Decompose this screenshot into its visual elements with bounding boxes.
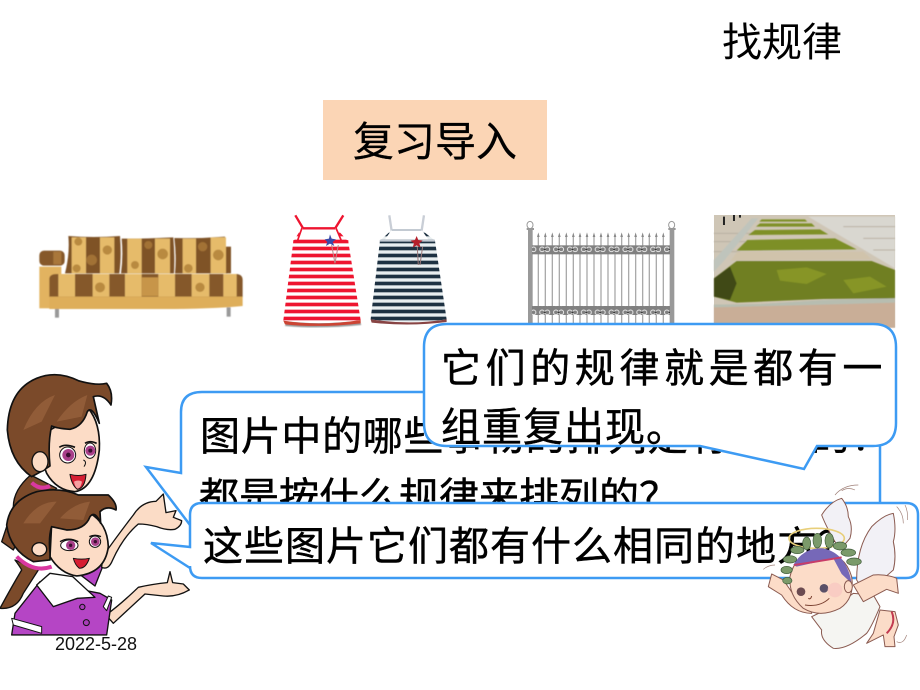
picture: striped dresses bbox=[283, 215, 447, 327]
speech bubble: teacher question: 图片中的哪些事物的排列是有规律的？ bbox=[200, 415, 892, 459]
wings bbox=[822, 498, 895, 585]
illustration: flying angel baby bbox=[763, 485, 908, 648]
title: 找规律: 找规律 bbox=[722, 21, 842, 65]
arms bbox=[853, 575, 898, 602]
navy striped dress bbox=[371, 215, 447, 325]
illustration: two girls presenting bbox=[0, 375, 189, 635]
picture: iron fence bbox=[527, 221, 676, 324]
picture: grass and paving photo bbox=[714, 215, 895, 328]
heading box: 复习导入: 复习导入 bbox=[353, 119, 517, 165]
halo bbox=[789, 528, 844, 548]
date stamp: 2022-5-28 bbox=[55, 634, 137, 654]
laurel leaves bbox=[781, 533, 861, 584]
speech bubble: answer about repeating groups: 它们的规律就是都有一 bbox=[441, 347, 887, 391]
speech bubble: answer about repeating groups: 组重复出现。 bbox=[441, 406, 687, 450]
heading box: 复习导入 bbox=[323, 100, 547, 180]
speech bubble: what is common: 这些图片它们都有什么相同的地方？ bbox=[203, 525, 859, 569]
head bbox=[790, 552, 852, 613]
speech bubble: teacher question: 都是按什么规律来排列的？ bbox=[199, 476, 679, 520]
speech bubble: teacher question bbox=[146, 392, 892, 560]
flight marks bbox=[763, 485, 908, 642]
front girl bbox=[0, 490, 189, 635]
face bbox=[797, 587, 805, 596]
body and gown bbox=[812, 593, 880, 648]
back girl bbox=[2, 375, 182, 586]
speech bubble: what is common bbox=[151, 503, 918, 578]
red striped dress bbox=[283, 215, 361, 327]
speech bubble: answer about repeating groups bbox=[424, 324, 896, 469]
picture: sofa bbox=[39, 236, 243, 318]
